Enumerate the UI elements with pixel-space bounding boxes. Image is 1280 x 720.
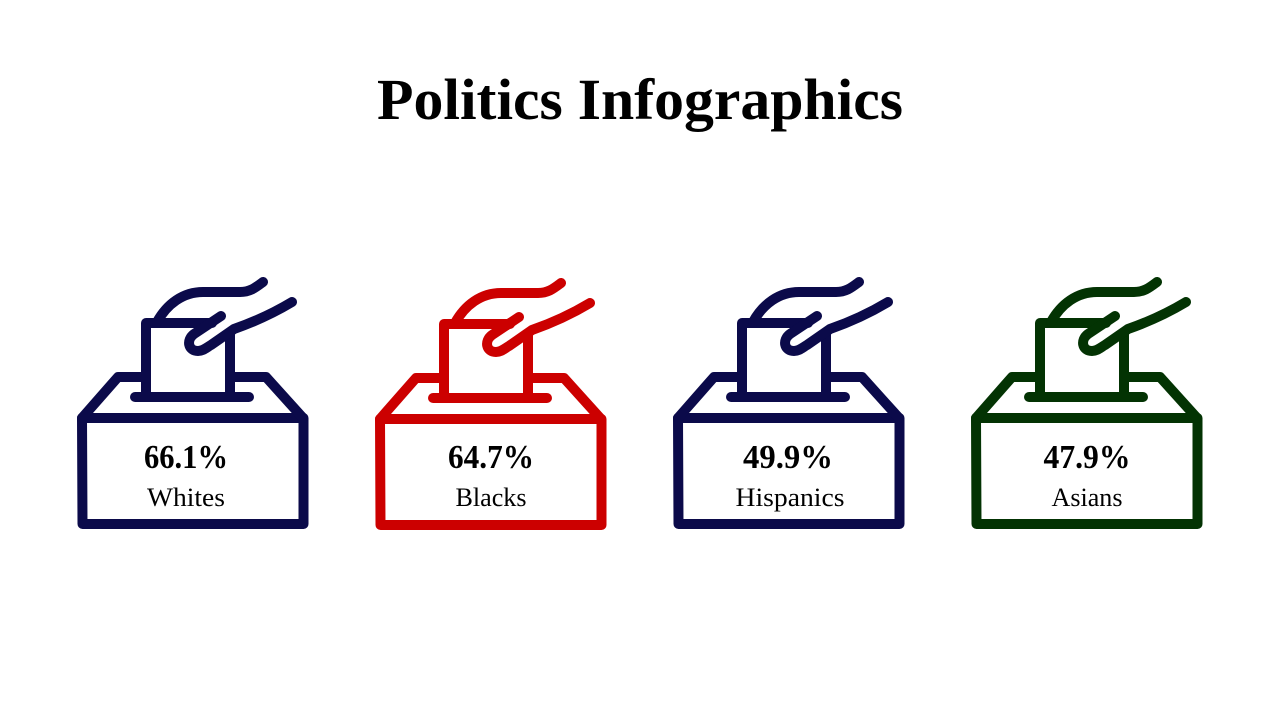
title: Politics Infographics bbox=[377, 67, 903, 132]
label: Blacks: Blacks bbox=[456, 483, 526, 512]
value: Hispanics: 49.9% bbox=[743, 439, 833, 476]
icon: ballot box Asians bbox=[976, 282, 1198, 524]
icon: ballot box Blacks bbox=[380, 283, 602, 525]
value: Asians: 47.9% bbox=[1044, 439, 1130, 476]
label: Whites: Whites bbox=[147, 483, 225, 512]
icon: ballot box Hispanics bbox=[678, 282, 900, 524]
value: Blacks: 64.7% bbox=[448, 439, 534, 476]
label: Asians: Asians bbox=[1052, 483, 1122, 512]
value: Whites: 66.1% bbox=[144, 439, 228, 476]
label: Hispanics: Hispanics bbox=[736, 483, 844, 512]
icon: ballot box Whites bbox=[82, 282, 304, 524]
